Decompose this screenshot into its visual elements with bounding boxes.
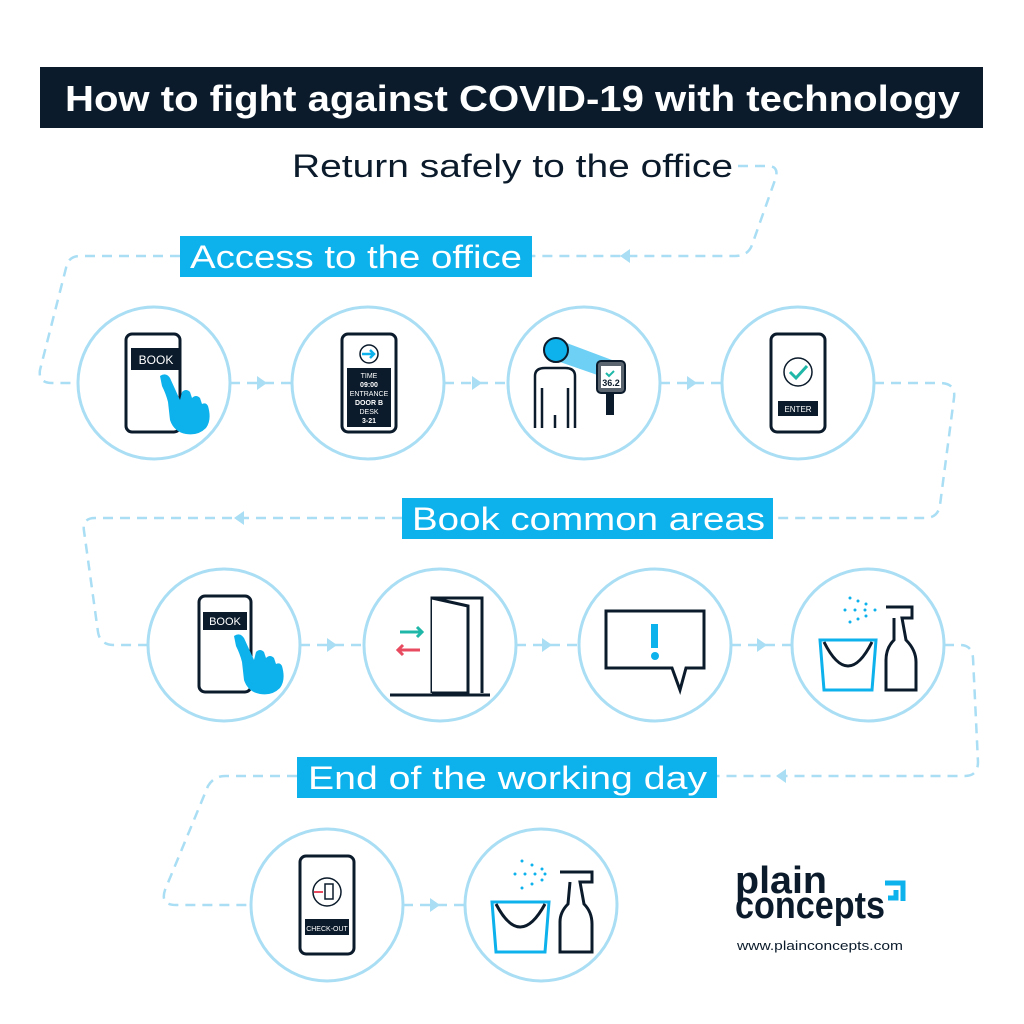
dashed path <box>40 166 978 905</box>
icon: door <box>390 598 490 695</box>
logo <box>735 860 903 953</box>
arrows <box>234 249 786 912</box>
label: end day: End of the working day <box>308 760 707 796</box>
icon: enter phone <box>771 334 825 432</box>
title: How to fight against COVID-19 with technology <box>65 78 960 119</box>
icon: enter phone: ENTER <box>784 405 812 414</box>
label: common areas: Book common areas <box>412 501 765 537</box>
icon: ticket phone: TIME <box>361 373 378 380</box>
icon: checkout phone <box>300 856 354 954</box>
icon: ticket phone: 09:00 <box>360 382 378 389</box>
icon: cleaning <box>820 596 916 690</box>
logo: www.plainconcepts.com <box>736 938 903 953</box>
label: common areas <box>402 498 773 539</box>
icon: cleaning 2 <box>492 860 592 952</box>
subtitle: Return safely to the office <box>292 148 733 184</box>
icon: ticket phone: ENTRANCE <box>350 391 389 398</box>
icon: ticket phone: DESK <box>359 409 379 416</box>
icon: thermometer scan <box>535 338 625 428</box>
logo: concepts <box>735 885 885 927</box>
icon: book phone <box>126 334 210 434</box>
icon: ticket phone <box>342 334 396 432</box>
label: access: Access to the office <box>190 239 522 275</box>
icon: ticket phone: 3-21 <box>362 418 376 425</box>
icon: alert bubble <box>606 611 704 690</box>
icon: ticket phone: DOOR B <box>355 400 383 407</box>
icon: checkout phone: CHECK-OUT <box>306 926 349 933</box>
circles <box>78 307 944 981</box>
icon: book phone: BOOK <box>139 353 173 367</box>
logo: plain <box>735 860 827 902</box>
label: end day <box>297 757 717 798</box>
icon: book phone 2 <box>199 596 284 694</box>
icon: thermometer scan: 36.2 <box>602 378 620 388</box>
label: access <box>180 236 532 277</box>
icon: book phone 2: BOOK <box>209 616 242 628</box>
title <box>40 67 983 128</box>
